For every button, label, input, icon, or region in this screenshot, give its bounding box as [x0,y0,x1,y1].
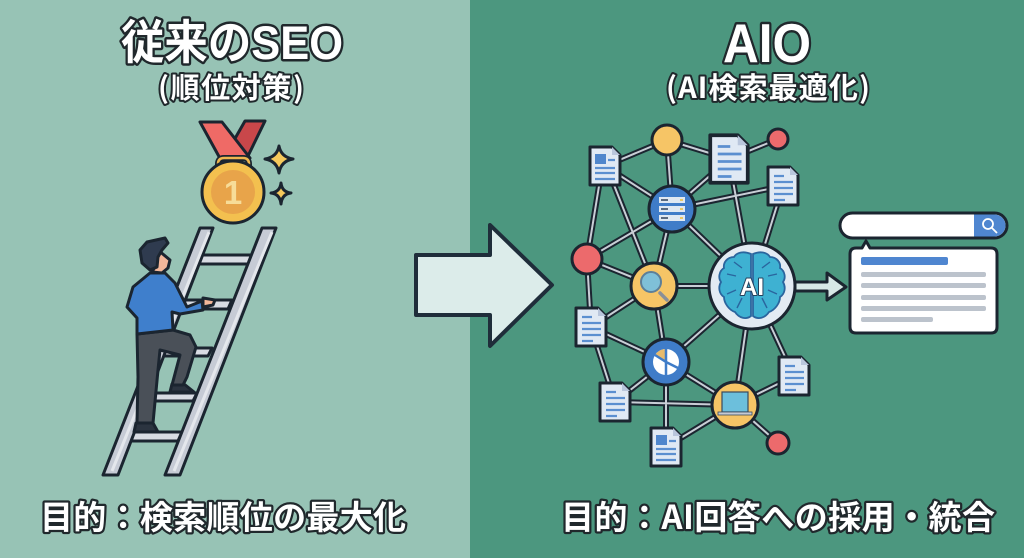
result card [850,241,997,333]
node: laptop [712,382,758,428]
node: top right red circle [768,129,788,149]
icon: person climbing ladder [127,238,215,432]
document: top large [710,135,748,183]
document: left [576,308,606,346]
node: server [649,186,695,232]
subtitle: AI search optimisation: (AI検索最適化) [666,65,870,107]
title: AIO: AIO [723,12,811,74]
document: bottom [651,428,681,466]
network connections [587,139,794,447]
arrow: from SEO to AIO [416,225,552,346]
document: top left [590,147,620,185]
arrow: AI to search result [795,273,846,300]
node: magnifier [631,263,677,309]
subtitle: ranking measures: (順位対策) [158,65,304,107]
document: upper right [768,167,798,205]
node: top yellow circle [652,125,682,155]
title: traditional SEO [121,16,343,107]
goal: left: 目的：検索順位の最大化 [40,491,406,539]
title: traditional SEO: 従来のSEO [121,16,343,69]
goal: right: 目的：AI回答への採用・統合 [561,491,995,539]
icon: medal with sparkles: 1 [224,174,242,211]
node: bottom red circle [767,432,789,454]
node: AI brain: AI [740,274,764,301]
document: lower right [779,357,809,395]
node: pie chart [643,339,689,385]
document: lower left [600,383,630,421]
node: left red circle [572,244,602,274]
icon: medal with sparkles [200,121,293,223]
node: AI brain [709,243,795,329]
title: AIO [666,12,870,107]
panel: traditional SEO background [0,0,470,558]
panel: AIO background [470,0,1024,558]
icon: ladder [103,228,276,475]
search bar [840,213,1007,238]
